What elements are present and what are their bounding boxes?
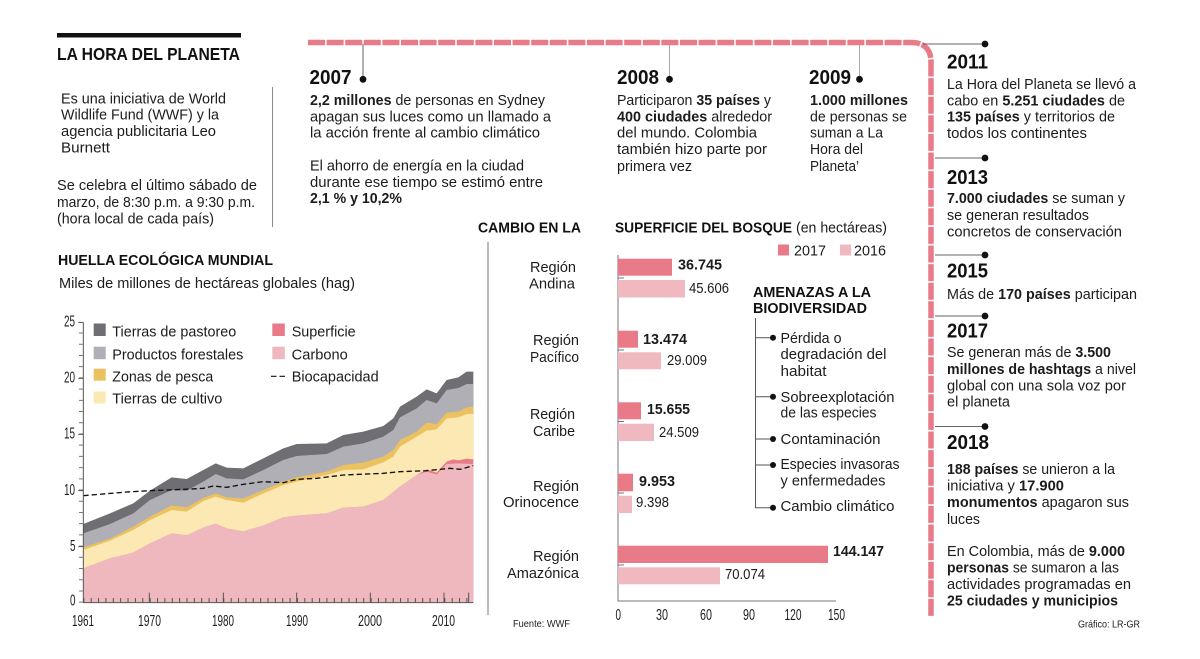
heading: cambio en la superficie del bosque: SUPERFICIE DEL BOSQUE: [615, 220, 792, 236]
milestone: 2018: luces: [947, 512, 980, 528]
panel: amenazas a la biodiversidad: Pérdida o: [780, 331, 842, 347]
milestone: 2013: se generan resultados: [947, 208, 1089, 224]
milestone: 2009: Planeta’: [810, 159, 859, 175]
bars: Región Amazónica: Amazónica: [507, 566, 580, 582]
bars: Región Caribe: Región: [530, 407, 575, 423]
heading: huella ecológica: [58, 251, 355, 292]
panel: amenazas a la biodiversidad: habitat: [780, 364, 826, 380]
milestone: 2017: [935, 313, 1136, 410]
y axis labels: 5: [70, 538, 76, 555]
milestone: 2009: Hora del: [810, 142, 863, 158]
milestone: 2009: 1.000 millones: [810, 93, 908, 109]
heading: cambio en la superficie del bosque: (en hectáreas): [796, 220, 887, 236]
milestone: 2007: [310, 44, 552, 207]
bars: Región Pacífico: Pacífico: [530, 350, 579, 366]
milestone: 2018: 188 países se unieron a la: [947, 462, 1116, 478]
milestone: 2007: la acción frente al cambio climático: [310, 126, 540, 142]
panel: amenazas a la biodiversidad: Sobreexplotación: [780, 390, 894, 406]
bar axis labels: [616, 607, 845, 624]
milestone: 2017: global con una sola voz por: [947, 378, 1126, 394]
bars: Región Andina: Andina: [529, 276, 576, 292]
x axis labels: 1980: [212, 613, 234, 630]
bar axis labels: 30: [656, 607, 668, 624]
bars: Región Amazónica: [507, 544, 884, 584]
area chart: huella ecológica: [64, 314, 473, 630]
text block: intro: agencia publicitaria Leo: [61, 124, 216, 140]
bars: Región Caribe: 15.655: [647, 402, 690, 418]
bars: Región Orinocence: Orinocence: [503, 495, 579, 511]
credit: gráfico: Gráfico: LR-GR: [1078, 618, 1140, 630]
divider between chart and bars: [487, 242, 489, 615]
legend: bars: 2016: [854, 244, 886, 260]
milestone: 2013: 7.000 ciudades se suman y: [947, 191, 1126, 207]
panel: amenazas a la biodiversidad: BIODIVERSIDAD: [753, 301, 867, 317]
bars: Región Andina: Región: [530, 260, 576, 276]
credit: fuente: Fuente: WWF: [513, 618, 570, 630]
milestone: 2008: [617, 45, 772, 175]
milestone: 2017: millones de hashtags a nivel: [947, 362, 1136, 378]
milestone: 2018: actividades programadas en: [947, 577, 1131, 593]
heading: huella ecológica: Miles de millones de hectáreas globales (hag): [59, 276, 355, 292]
milestone: 2008: Participaron 35 países y: [617, 93, 772, 109]
chart areas: [78, 322, 473, 603]
bars: Región Caribe: 24.509: [659, 425, 699, 441]
y axis labels: 15: [64, 426, 75, 442]
bars: Región Caribe: Caribe: [533, 424, 575, 440]
milestone: 2018: 2018: [947, 432, 989, 454]
milestone: 2011: cabo en 5.251 ciudades de: [947, 94, 1125, 110]
chart legend: [94, 324, 379, 408]
bar axis labels: 120: [784, 607, 802, 624]
bar axis labels: 60: [700, 607, 712, 624]
milestone: 2009: suman a La: [810, 126, 884, 142]
milestone: 2007: 2,1 % y 10,2%: [310, 191, 402, 207]
bars: Región Caribe: [530, 402, 699, 441]
milestone: 2018: iniciativa y 17.900: [947, 478, 1064, 494]
panel: amenazas a la biodiversidad: Especies invasoras: [780, 457, 900, 473]
x axis labels: 1961: [72, 613, 94, 630]
timeline arrow line: [308, 42, 931, 617]
y axis labels: 0: [70, 592, 76, 610]
bars: Región Pacífico: 13.474: [643, 332, 687, 348]
bars: Región Amazónica: 70.074: [725, 567, 765, 583]
bar axis labels: 150: [828, 607, 845, 624]
title: LA HORA DEL PLANETA: [57, 44, 240, 64]
milestone: 2011: 2011: [947, 52, 988, 74]
chart legend: Superficie: [292, 324, 356, 340]
bar chart: superficie del bosque: [503, 255, 884, 624]
milestone: 2007: 2,2 millones de personas en Sydney: [310, 93, 546, 109]
chart legend: Tierras de cultivo: [112, 392, 222, 408]
x axis labels: 2000: [358, 613, 382, 630]
bars: Región Pacífico: Región: [533, 333, 579, 349]
milestone: 2008: también hizo parte por: [617, 142, 767, 158]
milestone: 2015: 2015: [947, 260, 988, 282]
bars: Región Orinocence: 9.398: [636, 495, 669, 511]
legend: bars: 2017: [794, 244, 826, 260]
text block: intro: (hora local de cada país): [57, 212, 214, 228]
milestone: 2013: 2013: [947, 167, 988, 189]
text block: intro: Burnett: [61, 140, 110, 156]
bars: Región Pacífico: [530, 331, 707, 369]
y axis labels: 20: [64, 370, 75, 386]
milestone: 2015: Más de 170 países participan: [947, 287, 1137, 303]
heading: huella ecológica: HUELLA ECOLÓGICA MUNDIAL: [58, 251, 273, 269]
milestone: 2008: del mundo. Colombia: [617, 126, 758, 142]
milestone: 2007: El ahorro de energía en la ciudad: [310, 158, 524, 174]
milestone: 2009: 2009: [809, 67, 851, 89]
milestone: 2013: concretos de conservación: [947, 224, 1122, 240]
milestone: 2015: [935, 252, 1137, 303]
panel: amenazas a la biodiversidad: degradación del: [780, 347, 886, 363]
milestone: 2008: 400 ciudades alrededor: [617, 110, 772, 126]
milestone: 2018: 25 ciudades y municipios: [947, 594, 1118, 610]
milestone: 2007: durante ese tiempo se estimó entre: [310, 175, 543, 191]
heading: cambio en la superficie del bosque: CAMBIO EN LA: [478, 220, 581, 236]
milestone: 2007: apagan sus luces como un llamado a: [310, 110, 552, 126]
chart legend: Productos forestales: [112, 348, 243, 364]
y axis labels: 25: [64, 314, 75, 330]
chart legend: Biocapacidad: [292, 370, 379, 386]
panel: amenazas a la biodiversidad: Contaminación: [780, 432, 880, 448]
bars: Región Amazónica: Región: [533, 549, 579, 565]
milestone: 2018: En Colombia, más de 9.000: [947, 544, 1125, 560]
bars: Región Orinocence: [503, 474, 675, 513]
panel: amenazas a la biodiversidad: Cambio climático: [780, 499, 894, 515]
bar axis labels: 0: [616, 607, 621, 624]
text block: intro: Wildlife Fund (WWF) y la: [61, 108, 220, 124]
bars: Región Orinocence: Región: [533, 479, 579, 495]
milestone: 2011: [923, 41, 1137, 142]
milestone: 2017: 2017: [947, 320, 988, 342]
bar axes: [618, 255, 836, 601]
panel: amenazas a la biodiversidad: [753, 285, 900, 515]
title: [57, 33, 241, 64]
milestone: 2011: La Hora del Planeta se llevó a: [947, 77, 1137, 93]
milestone: 2008: primera vez: [617, 159, 692, 175]
panel: amenazas a la biodiversidad: y enfermedades: [780, 474, 886, 490]
legend: bars: [778, 244, 886, 260]
bars: Región Pacífico: 29.009: [667, 353, 707, 369]
x axis labels: [72, 613, 455, 630]
milestone: 2018: monumentos apagaron sus: [947, 495, 1129, 511]
y axis labels: [64, 314, 76, 610]
text block: intro: [57, 92, 257, 228]
bars: Región Amazónica: 144.147: [833, 544, 884, 560]
panel: amenazas a la biodiversidad: de las especies: [780, 406, 876, 422]
x axis labels: 1990: [286, 613, 308, 630]
panel: amenazas a la biodiversidad: AMENAZAS A LA: [753, 285, 872, 301]
bars: Región Andina: [529, 258, 729, 298]
milestone: 2008: 2008: [617, 67, 659, 89]
milestone: 2018: [935, 423, 1131, 610]
bars: Región Andina: 36.745: [678, 258, 722, 274]
x axis labels: 2010: [432, 613, 455, 630]
bars: Región Andina: 45.606: [689, 281, 729, 297]
milestone: 2017: Se generan más de 3.500: [947, 345, 1111, 361]
milestone: 2011: todos los continentes: [947, 126, 1087, 142]
x axis labels: 1970: [138, 613, 161, 630]
milestone: 2011: 135 países y territorios de: [947, 110, 1115, 126]
text block: intro: marzo, de 8:30 p.m. a 9:30 p.m.: [57, 195, 255, 211]
milestone: 2007: 2007: [310, 67, 352, 89]
text block: intro: Se celebra el último sábado de: [57, 178, 257, 194]
milestone: 2009: [809, 45, 908, 175]
milestone: 2018: personas se sumaron a las: [947, 560, 1119, 576]
milestone: 2013: [935, 155, 1126, 240]
milestone: 2017: el planeta: [947, 394, 1011, 410]
chart legend: Carbono: [292, 348, 348, 364]
y axis labels: 10: [64, 482, 75, 499]
chart legend: Zonas de pesca: [112, 370, 214, 386]
heading: cambio en la superficie del bosque: [478, 220, 887, 236]
milestone: 2009: de personas se: [810, 110, 907, 126]
bar axis labels: 90: [743, 607, 755, 624]
chart legend: Tierras de pastoreo: [112, 324, 236, 340]
text block: intro: Es una iniciativa de World: [61, 92, 226, 108]
bars: Región Orinocence: 9.953: [639, 474, 675, 490]
